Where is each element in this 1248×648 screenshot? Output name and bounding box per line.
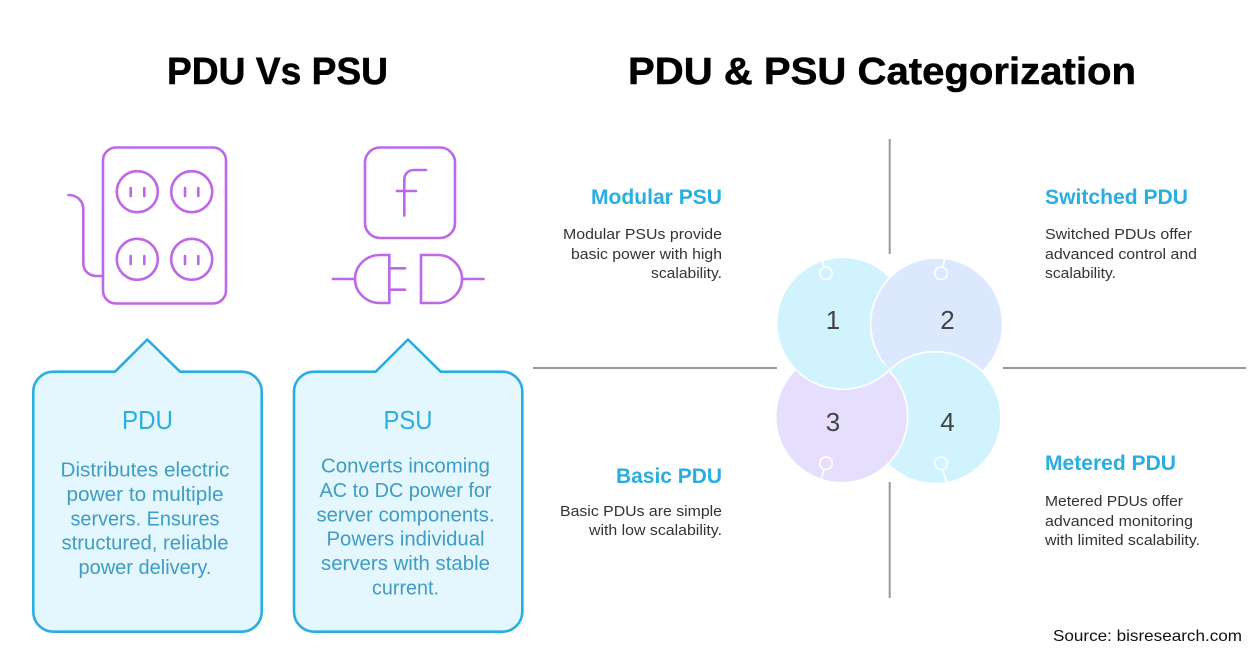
callout: PSU: servers with stable xyxy=(321,553,490,575)
callout: PSU: AC to DC power for xyxy=(320,480,492,502)
text block: Metered PDU: Metered PDUs offer xyxy=(1045,493,1183,510)
text block: Switched PDU: Switched PDUs offer xyxy=(1045,226,1192,243)
circle 3 xyxy=(776,351,908,483)
source note: Source: bisresearch.com xyxy=(1053,628,1242,645)
title: PDU & PSU Categorization: PDU & PSU Categorization xyxy=(628,51,1136,93)
circle 2 xyxy=(871,258,1003,390)
marker 4 xyxy=(935,457,947,483)
callout: PDU: PDU xyxy=(122,405,173,435)
circle 1 overlap over circle 3 xyxy=(794,350,890,390)
text block: Basic PDU: Basic PDUs are simple xyxy=(560,503,722,520)
callout: PSU: server components. xyxy=(316,504,494,526)
callout: PSU: PSU xyxy=(384,405,432,435)
icon: PDU power strip xyxy=(68,148,226,304)
marker 1 xyxy=(820,258,832,279)
icon: PSU fuse box and plug xyxy=(333,148,484,303)
callout: PSU: Powers individual xyxy=(326,529,484,551)
text block: Switched PDU: scalability. xyxy=(1045,265,1116,282)
number 4: 4 xyxy=(940,407,955,437)
circle 4 xyxy=(869,352,1001,484)
circle 1 xyxy=(777,257,909,389)
text block: Basic PDU: with low scalability. xyxy=(588,522,722,539)
text block: Switched PDU: advanced control and xyxy=(1045,246,1197,263)
text block: Metered PDU: with limited scalability. xyxy=(1044,532,1200,549)
number 1: 1 xyxy=(826,305,840,335)
text block: Modular PSU: Modular PSU xyxy=(591,186,722,209)
number 2: 2 xyxy=(940,305,955,335)
callout: PSU: Converts incoming xyxy=(321,456,490,478)
text block: Switched PDU xyxy=(1045,186,1197,282)
number 3: 3 xyxy=(826,407,840,437)
text block: Metered PDU xyxy=(1044,452,1200,549)
text block: Modular PSU: basic power with high xyxy=(571,246,722,263)
callout: PDU: power delivery. xyxy=(78,557,212,579)
callout: PDU: power to multiple xyxy=(66,484,224,506)
text block: Basic PDU: Basic PDU xyxy=(616,465,722,488)
text block: Switched PDU: Switched PDU xyxy=(1045,186,1188,209)
marker 3 xyxy=(820,457,832,480)
callout: PDU: servers. Ensures xyxy=(70,508,220,530)
text block: Basic PDU xyxy=(560,465,722,539)
title: PDU Vs PSU: PDU Vs PSU xyxy=(167,51,388,93)
callout: PSU xyxy=(294,340,522,632)
callout: PDU: structured, reliable xyxy=(62,533,228,555)
text block: Modular PSU xyxy=(563,186,722,282)
text block: Modular PSU: scalability. xyxy=(651,265,722,282)
text block: Modular PSU: Modular PSUs provide xyxy=(563,226,722,243)
diagram: four overlapping numbered circles xyxy=(776,257,1003,484)
text block: Metered PDU: advanced monitoring xyxy=(1045,513,1193,530)
marker 2 xyxy=(935,258,947,279)
callout: PDU: Distributes electric xyxy=(60,460,230,482)
callout: PSU: current. xyxy=(372,577,439,599)
text block: Metered PDU: Metered PDU xyxy=(1045,452,1176,475)
callout: PDU xyxy=(33,340,262,632)
quadrant axes xyxy=(533,139,1246,598)
